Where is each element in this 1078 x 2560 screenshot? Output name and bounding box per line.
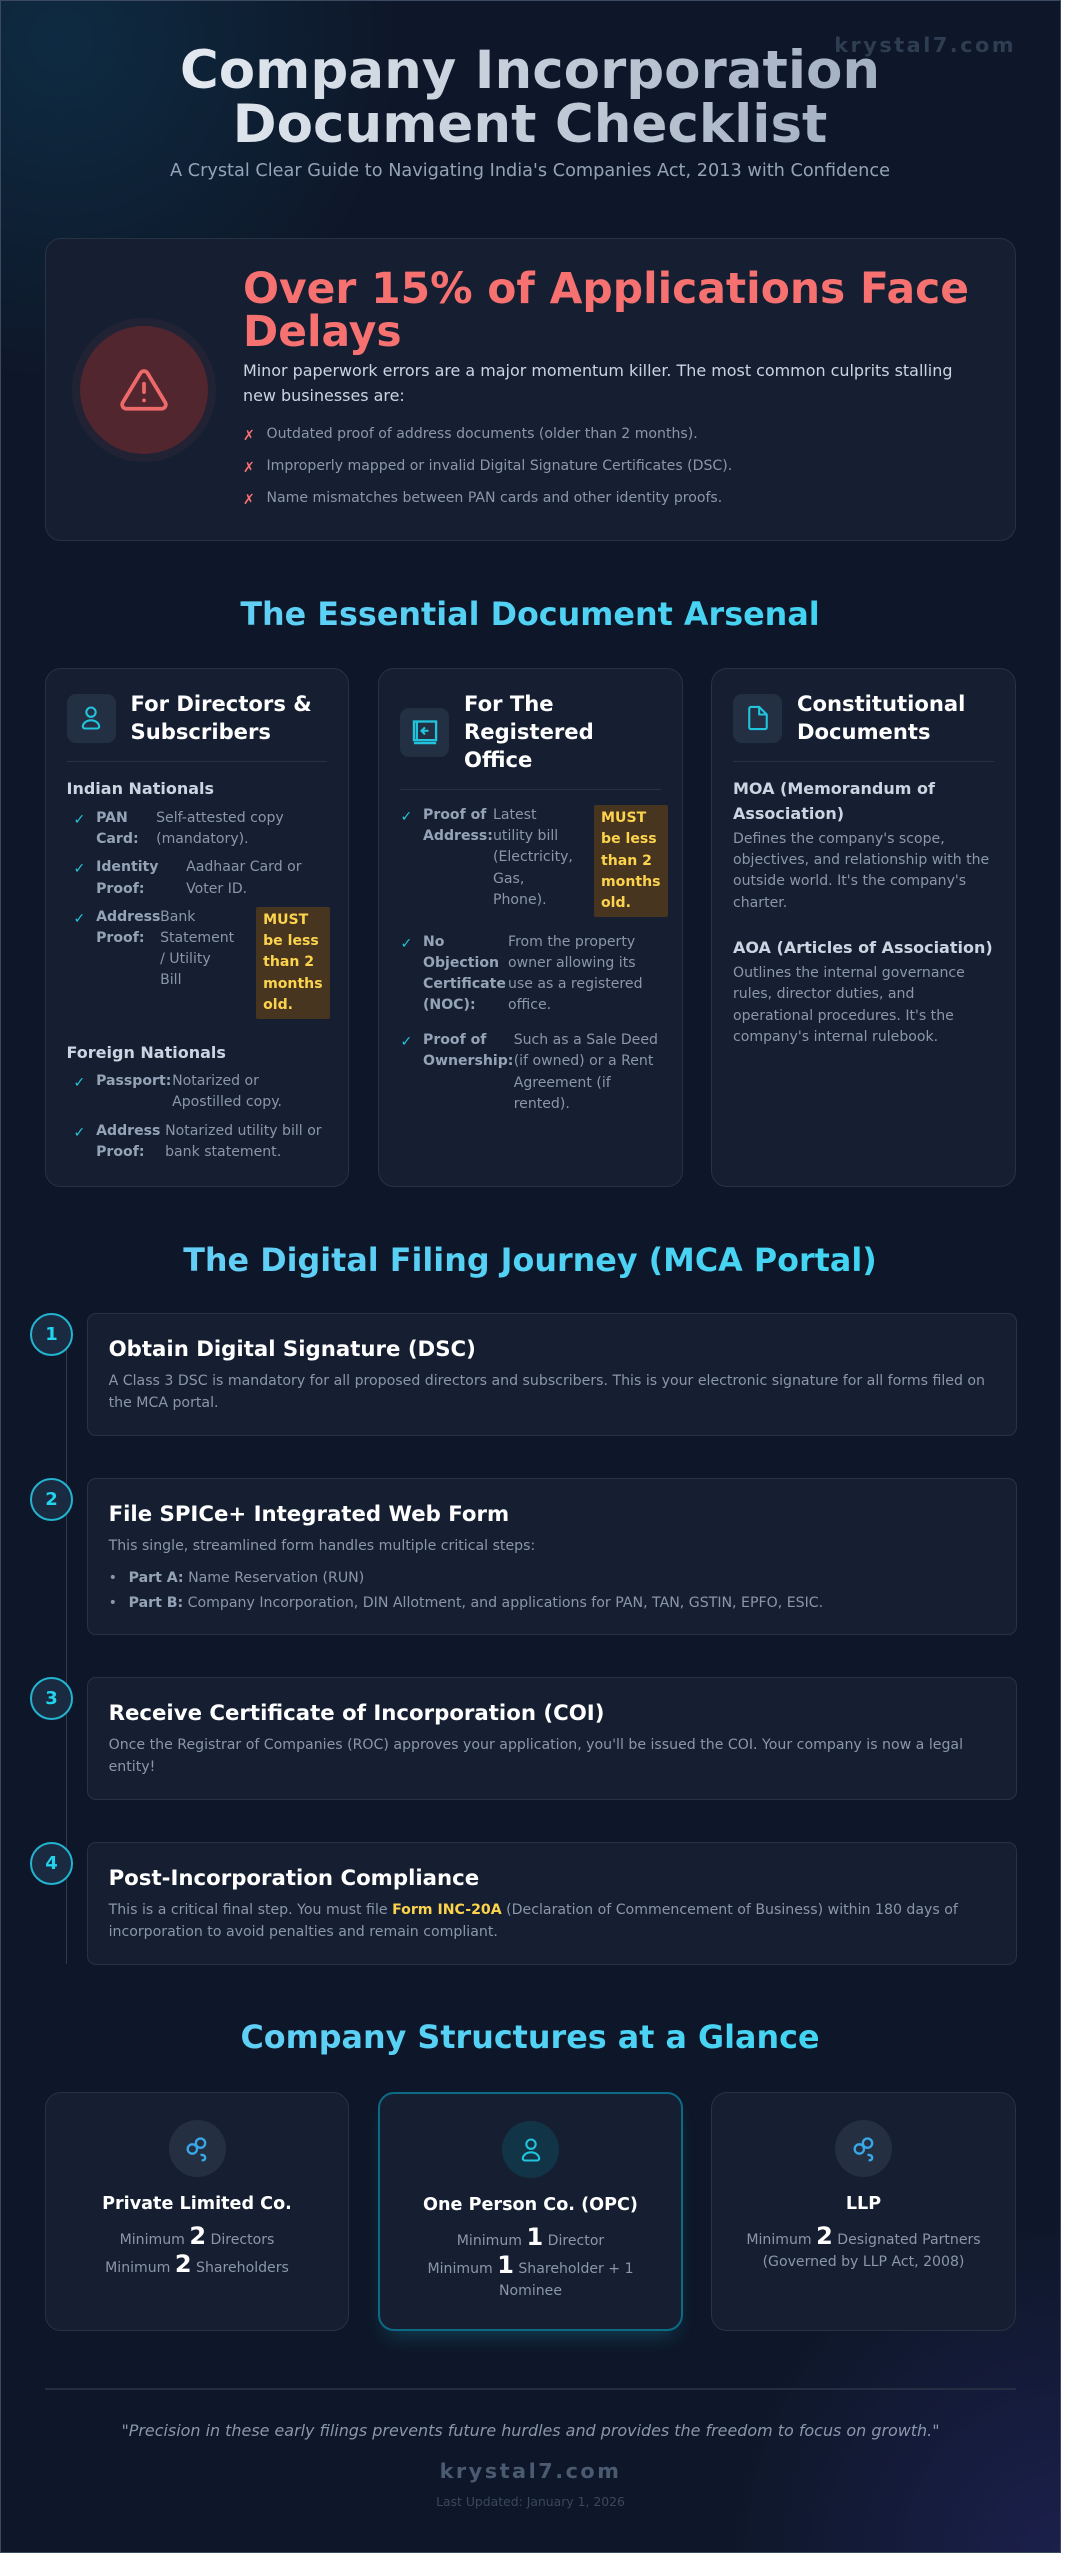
common errors list: Improperly mapped or invalid Digital Signature Certificates (DSC). [266, 458, 732, 474]
heading: filing journey [45, 1241, 1015, 1281]
panel: one person company [378, 2092, 683, 2331]
common errors list: Outdated proof of address documents (older than 2 months). [266, 426, 698, 442]
step 3 description: Once the Registrar of Companies (ROC) approves your application, you'll be issued the COI. Your company is now a legal entity! [109, 1737, 963, 1775]
step 2 parts list: Part B: Company Incorporation, DIN Allotment, and applications for PAN, TAN, GSTIN, EPFO, ESIC. [129, 1595, 823, 1611]
panel heading: For The Registered Office [464, 691, 594, 772]
structure requirements [746, 2222, 981, 2270]
structure name: LLP [846, 2194, 881, 2214]
step number 1 [30, 1313, 73, 1356]
watermark: krystal7.com [834, 33, 1016, 57]
foreign nationals checklist: Notarized utility bill or bank statement. [165, 1123, 322, 1160]
step 2 parts list: Part A: Name Reservation (RUN) [129, 1570, 364, 1586]
step number 4: 4 [45, 1853, 58, 1874]
common errors list: Name mismatches between PAN cards and other identity proofs. [266, 490, 722, 506]
step number 4 [30, 1842, 73, 1885]
structure requirements: Minimum 1 Shareholder + 1 Nominee [427, 2251, 634, 2299]
step number 2: 2 [45, 1489, 58, 1510]
icon: linked people [835, 2120, 892, 2177]
footer divider [45, 2388, 1016, 2390]
AOA heading: AOA (Articles of Association) [733, 938, 993, 957]
heading: company structures: Company Structures at a Glance [240, 2019, 820, 2056]
registered office checklist: months [601, 874, 660, 890]
foreign nationals checklist: Address Proof: [96, 1123, 160, 1160]
Indian nationals checklist: be less [263, 933, 319, 949]
step 4 title: Post-Incorporation Compliance [109, 1866, 479, 1891]
AOA description: Outlines the internal governance rules, director duties, and operational procedures. It's the company's internal rulebook. [733, 965, 965, 1045]
Indian nationals checklist: Bank Statement / Utility [160, 909, 234, 967]
icon: document [733, 694, 782, 742]
title: Company Incorporation [180, 40, 880, 101]
step 2 description: This single, streamlined form handles multiple critical steps: [109, 1538, 535, 1554]
Indian nationals checklist [76, 810, 330, 1019]
footer brand: krystal7.com [440, 2459, 621, 2483]
panel: constitutional documents [711, 668, 1016, 1187]
common errors list: ✗ [243, 492, 255, 508]
registered office checklist: Such as a Sale Deed (if owned) or a Rent Agreement (if rented). [514, 1032, 658, 1112]
step 2 title: File SPICe+ Integrated Web Form [109, 1502, 509, 1527]
step 4 card [87, 1842, 1017, 1965]
foreign nationals checklist [76, 1073, 322, 1160]
step 3 card [87, 1677, 1017, 1800]
Indian nationals checklist: old. [263, 997, 293, 1013]
step 1 card [87, 1313, 1017, 1436]
registered office checklist: From the property owner allowing its use as a registered office. [508, 934, 643, 1013]
registered office checklist: Proof of Address: [423, 807, 493, 844]
icon: linked people [168, 2120, 226, 2177]
panel: registered office [378, 668, 683, 1187]
panel: LLP [711, 2092, 1016, 2331]
Indian nationals checklist: months [263, 976, 323, 992]
registered office checklist [402, 805, 668, 1112]
step 3 title: Receive Certificate of Incorporation (COI) [109, 1701, 604, 1726]
registered office checklist: No Objection Certificate (NOC): [423, 934, 506, 1013]
common errors list: ✗ [243, 428, 255, 444]
structure name: Private Limited Co. [102, 2194, 292, 2214]
foreign nationals checklist: Notarized or Apostilled copy. [172, 1073, 282, 1110]
heading: company structures [45, 2018, 1015, 2058]
registered office checklist: old. [601, 895, 631, 911]
Indian nationals checklist: Aadhaar Card or Voter ID. [186, 859, 302, 897]
registered office checklist: than 2 [601, 853, 652, 869]
title: Document Checklist [233, 94, 827, 155]
step 2 parts list [109, 1570, 823, 1611]
registered office checklist: Latest utility bill (Electricity, Gas, Phone). [493, 807, 573, 908]
structure requirements: Minimum 2 Shareholders [105, 2250, 289, 2278]
subheading: foreign nationals: Foreign Nationals [66, 1043, 226, 1062]
heading: document arsenal [45, 595, 1015, 635]
step 1 title: Obtain Digital Signature (DSC) [109, 1337, 476, 1362]
structure requirements [427, 2223, 634, 2299]
warning heading: Over 15% of Applications Face Delays [243, 264, 969, 356]
foreign nationals checklist: Passport: [96, 1073, 171, 1089]
step 2 card [87, 1478, 1017, 1635]
warning description: Minor paperwork errors are a major momentum killer. The most common culprits stalling new businesses are: [243, 361, 952, 405]
panel heading: Constitutional Documents [797, 691, 965, 744]
warning text [243, 264, 969, 508]
panel: directors and subscribers [45, 668, 349, 1187]
Indian nationals checklist: Identity Proof: [96, 859, 158, 897]
last updated: Last Updated: January 1, 2026 [436, 2494, 625, 2509]
Indian nationals checklist: Bill [160, 972, 182, 988]
common errors list [243, 426, 732, 508]
panel: private limited company [45, 2092, 349, 2331]
structure requirements: (Governed by LLP Act, 2008) [763, 2254, 964, 2270]
step number 3: 3 [45, 1688, 58, 1709]
structure requirements: Minimum 2 Directors [120, 2222, 274, 2250]
icon: person [502, 2121, 559, 2178]
step 2 parts list: • [109, 1570, 117, 1586]
step number 2 [30, 1478, 73, 1521]
footer quote: "Precision in these early filings prevents future hurdles and provides the freedom to focus on growth." [121, 2421, 940, 2440]
MOA description: Defines the company's scope, objectives, and relationship with the outside world. It's the company's charter. [733, 831, 989, 911]
panel heading [400, 690, 661, 790]
icon: building [400, 708, 449, 756]
icon: person [66, 694, 116, 742]
timeline line [66, 1321, 67, 1964]
step 2 parts list: • [109, 1595, 117, 1611]
heading: document arsenal: The Essential Document Arsenal [240, 596, 820, 633]
panel: delay warning [45, 238, 1016, 541]
Indian nationals checklist: Address Proof: [96, 909, 160, 946]
panel heading [66, 690, 327, 762]
step 1 description: A Class 3 DSC is mandatory for all proposed directors and subscribers. This is your electronic signature for all forms filed on the MCA portal. [109, 1373, 985, 1411]
structure name: One Person Co. (OPC) [423, 2195, 638, 2215]
Indian nationals checklist: Self-attested copy (mandatory). [156, 810, 284, 847]
Indian nationals checklist: MUST [263, 912, 308, 928]
heading: filing journey: The Digital Filing Journey (MCA Portal) [183, 1242, 877, 1279]
subtitle: A Crystal Clear Guide to Navigating India's Companies Act, 2013 with Confidence [170, 161, 890, 181]
subheading: Indian nationals: Indian Nationals [66, 779, 214, 798]
step number 3 [30, 1677, 73, 1720]
MOA heading: MOA (Memorandum of Association) [733, 779, 935, 823]
panel heading [733, 690, 994, 762]
Indian nationals checklist: than 2 [263, 954, 314, 970]
structure requirements: Minimum 2 Designated Partners [746, 2222, 981, 2250]
icon: warning triangle [80, 326, 208, 454]
registered office checklist: Proof of Ownership: [423, 1032, 513, 1069]
common errors list: ✗ [243, 460, 255, 476]
registered office checklist: MUST [601, 810, 646, 826]
step number 1: 1 [45, 1324, 58, 1345]
Indian nationals checklist: PAN Card: [96, 810, 139, 847]
structure requirements: Minimum 1 Director [457, 2223, 604, 2251]
structure requirements [105, 2222, 289, 2278]
step 4 description: This is a critical final step. You must file Form INC-20A (Declaration of Commencement of Business) within 180 days of incorporation to avoid penalties and remain compliant. [109, 1902, 958, 1940]
panel heading: For Directors & Subscribers [130, 691, 312, 744]
title [45, 44, 1015, 151]
registered office checklist: be less [601, 831, 657, 847]
